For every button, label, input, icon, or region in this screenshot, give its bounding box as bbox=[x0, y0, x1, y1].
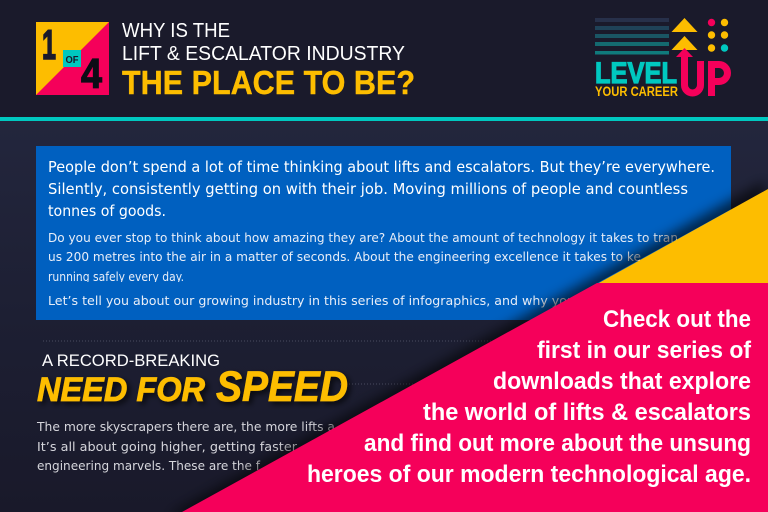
panel: blue introduction: tonnes of goods. bbox=[48, 202, 166, 220]
text block: need for speed intro: It’s all about going higher, getting faster bbox=[37, 439, 298, 454]
heading: a record-breaking need for speed: NEED FOR bbox=[37, 371, 205, 409]
teal header rule bbox=[0, 117, 768, 121]
callout text: first in our series of bbox=[537, 337, 752, 364]
panel: blue introduction bbox=[36, 146, 731, 320]
panel: blue introduction: us 200 metres into the air in a matter of seconds. About the engineering excellence it takes to ke bbox=[48, 249, 641, 264]
panel: blue introduction: Let’s tell you about our growing industry in this series of infographics, and why you bbox=[48, 293, 575, 308]
panel: body background bbox=[0, 121, 768, 512]
logo: level up your career bbox=[595, 18, 728, 99]
badge: 1 of 4: 1 bbox=[42, 21, 56, 68]
text block: need for speed intro: The more skyscrapers there are, the more lifts a bbox=[36, 419, 335, 434]
callout text: Check out the bbox=[603, 306, 751, 333]
title bbox=[122, 20, 415, 101]
panel: yellow triangle bbox=[597, 189, 768, 284]
heading: a record-breaking need for speed: SPEED bbox=[216, 363, 348, 411]
diagonal shadow bbox=[167, 181, 765, 512]
panel: pink callout bbox=[182, 283, 768, 512]
heading: a record-breaking need for speed: A RECORD-BREAKING bbox=[42, 351, 220, 370]
callout text: the world of lifts & escalators bbox=[423, 399, 751, 426]
callout text: heroes of our modern technological age. bbox=[307, 461, 751, 488]
logo: level up your career: YOUR CAREER bbox=[595, 84, 678, 99]
badge: 1 of 4: 4 bbox=[81, 50, 103, 97]
panel: header background bbox=[0, 0, 768, 117]
heading: a record-breaking need for speed bbox=[37, 351, 348, 411]
badge: 1 of 4: OF bbox=[66, 55, 78, 66]
title: THE PLACE TO BE? bbox=[122, 64, 415, 101]
title: WHY IS THE bbox=[122, 20, 230, 42]
title: LIFT & ESCALATOR INDUSTRY bbox=[122, 43, 405, 65]
panel: blue introduction: Silently, consistently getting on with their job. Moving millions of people and countless bbox=[48, 180, 688, 198]
badge: 1 of 4 bbox=[36, 21, 109, 97]
text block: need for speed intro bbox=[36, 419, 335, 473]
panel: blue introduction: People don’t spend a lot of time thinking about lifts and escalators. But they’re everywhere. bbox=[48, 158, 715, 176]
callout text: and find out more about the unsung bbox=[364, 430, 751, 457]
panel: blue introduction: running safely every day. bbox=[48, 269, 184, 284]
panel: blue introduction: Do you ever stop to think about how amazing they are? About the amount of technology it takes to tran bbox=[48, 230, 678, 245]
text block: need for speed intro: engineering marvels. These are the f bbox=[37, 458, 261, 473]
callout text bbox=[307, 306, 752, 488]
callout text: downloads that explore bbox=[493, 368, 751, 395]
logo: level up your career: LEVEL bbox=[595, 57, 677, 90]
